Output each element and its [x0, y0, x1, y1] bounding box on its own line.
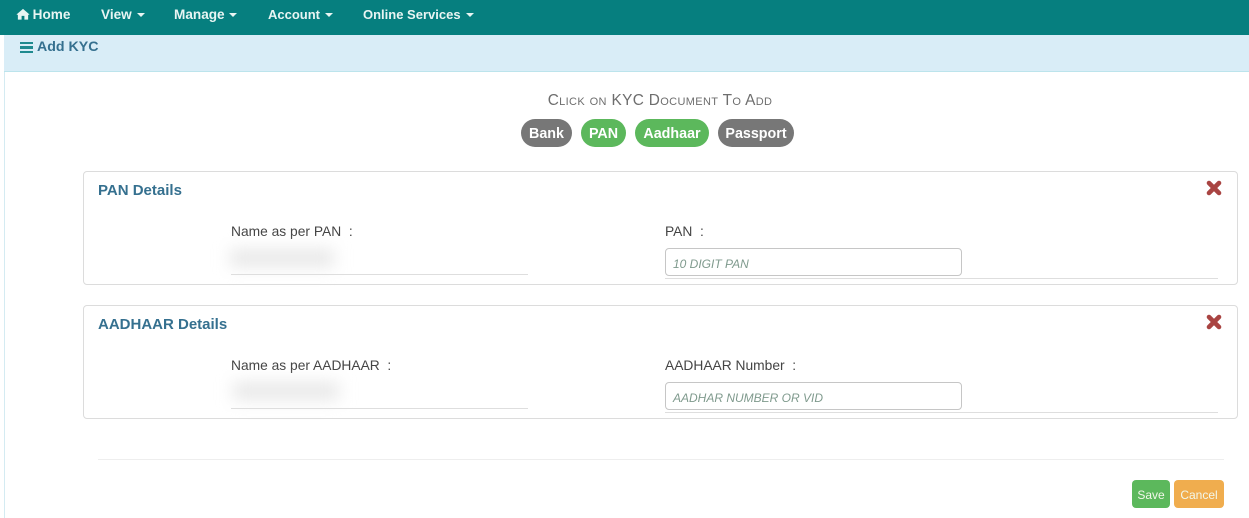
panel heading: aadhaar details: AADHAAR Details	[98, 316, 227, 333]
button: save: Save	[1137, 488, 1165, 502]
icon: remove pan	[1206, 180, 1222, 196]
nav item: view: View	[101, 7, 132, 22]
input: pan	[665, 248, 962, 276]
input: pan: 10 DIGIT PAN	[673, 257, 749, 271]
nav item: manage: Manage	[174, 7, 225, 22]
panel: pan details	[83, 171, 1238, 285]
document button: bank: Bank	[529, 126, 564, 142]
icon: menu	[20, 42, 33, 53]
document button: pan	[581, 119, 626, 147]
name underline	[231, 408, 528, 409]
document button: bank	[521, 119, 572, 147]
label: name as per pan: Name as per PAN :	[231, 224, 353, 239]
label: pan: PAN :	[665, 224, 704, 239]
document button: pan: PAN	[589, 126, 618, 142]
input: aadhaar number: AADHAR NUMBER OR VID	[673, 391, 823, 405]
document button: aadhaar	[635, 119, 709, 147]
instruction text: Click on KYC Document To Add	[548, 92, 772, 109]
button: cancel	[1174, 480, 1224, 508]
document button: aadhaar: Aadhaar	[643, 126, 701, 142]
icon: remove aadhaar	[1206, 314, 1222, 330]
button: save	[1132, 480, 1170, 508]
document button: passport: Passport	[725, 126, 787, 142]
heading: add kyc: Add KYC	[37, 39, 98, 55]
blurred name value	[233, 382, 339, 400]
page left border	[4, 35, 5, 518]
input underline	[665, 412, 1218, 413]
label: aadhaar number: AADHAAR Number :	[665, 358, 796, 373]
panel heading: pan details: PAN Details	[98, 182, 182, 199]
document button: passport	[718, 119, 794, 147]
navigation bar	[0, 0, 1249, 35]
button: cancel: Cancel	[1180, 488, 1218, 502]
nav item: online services: Online Services	[363, 7, 461, 22]
name underline	[231, 274, 528, 275]
panel: aadhaar details	[83, 305, 1238, 419]
page header band	[4, 35, 1249, 72]
input: aadhaar number	[665, 382, 962, 410]
blurred name value	[230, 249, 334, 267]
nav item: account: Account	[268, 7, 320, 22]
label: name as per aadhaar: Name as per AADHAAR :	[231, 358, 391, 373]
nav item: view	[101, 7, 145, 22]
input underline	[665, 278, 1218, 279]
footer divider	[98, 459, 1224, 460]
nav item: home: Home	[33, 7, 70, 22]
